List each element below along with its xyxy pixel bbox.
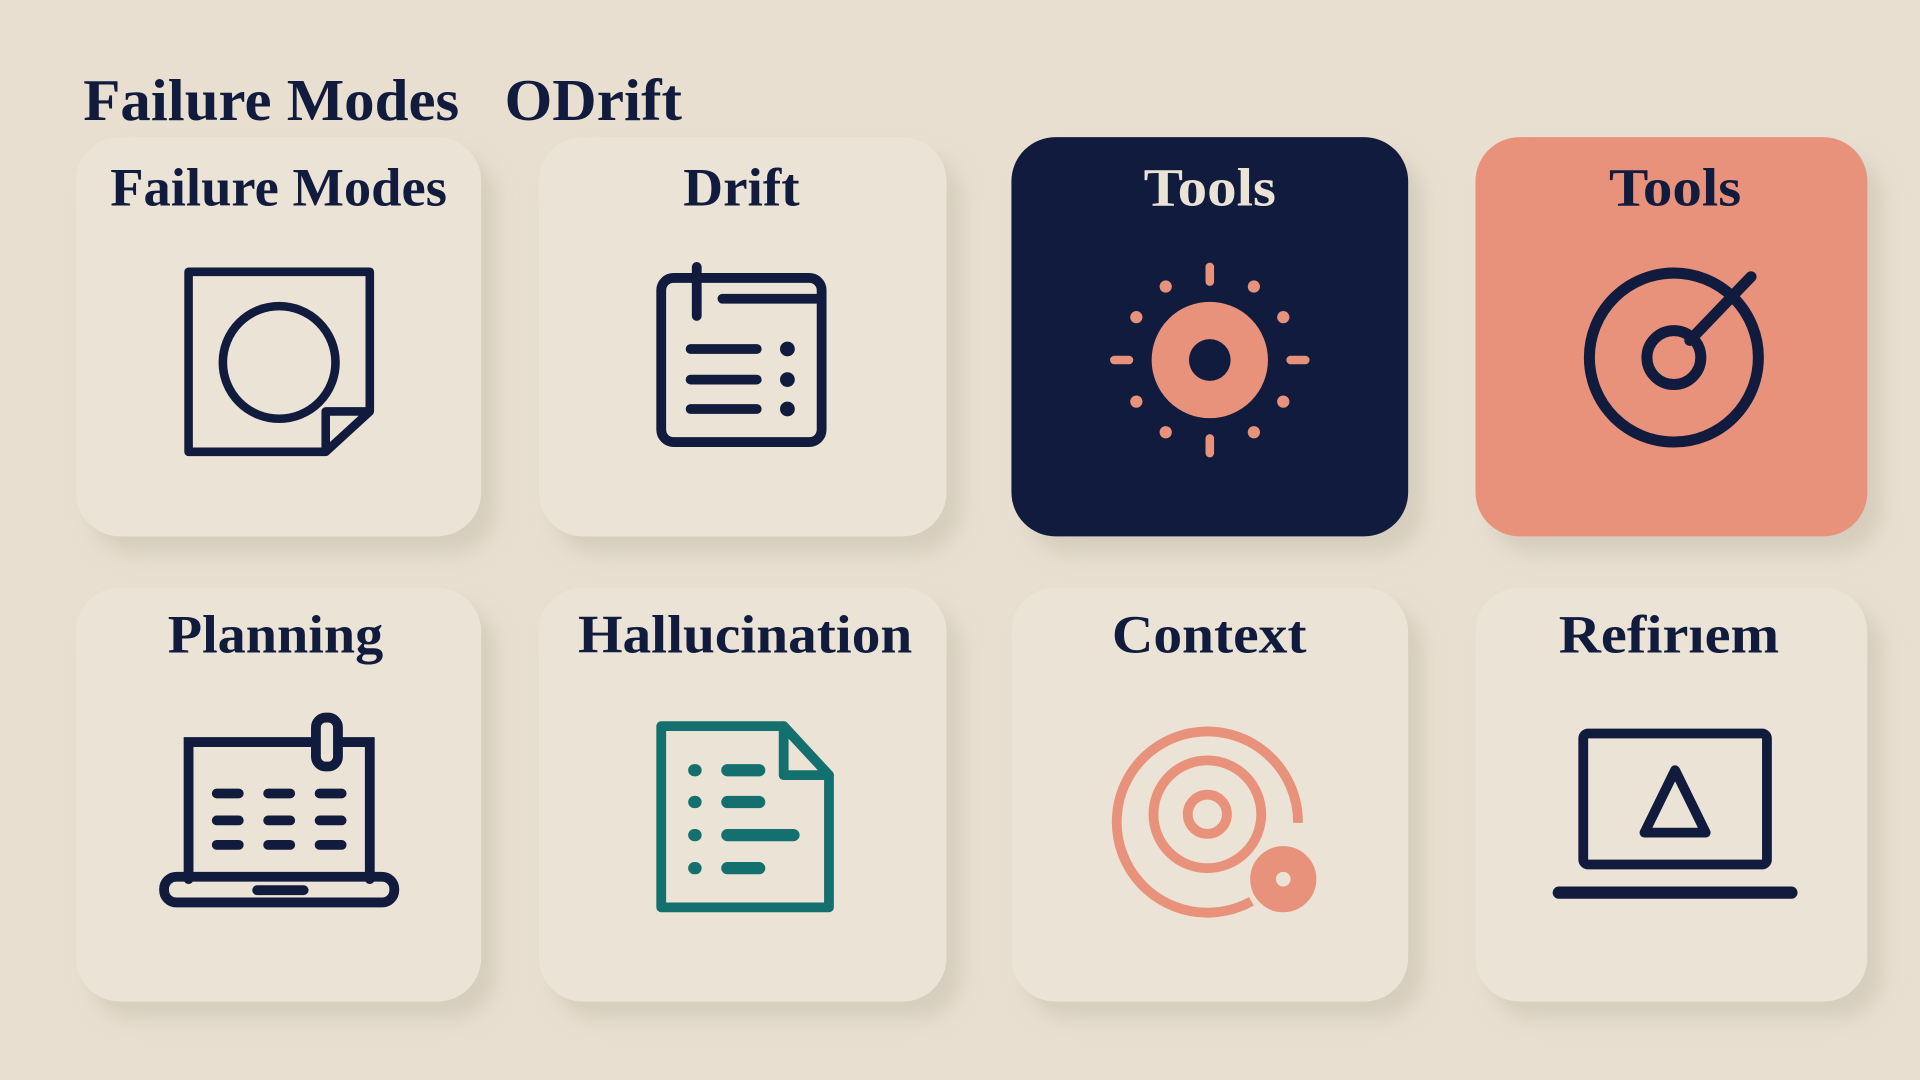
- icon: note with circle: [189, 272, 370, 452]
- heading: refinement: Refirıem: [1559, 605, 1779, 665]
- title: ODrift: [504, 68, 682, 133]
- panel: drift: [539, 137, 961, 553]
- panel: hallucination: [539, 588, 961, 1019]
- panel: context: [1011, 588, 1423, 1019]
- heading: failure modes: Failure Modes: [110, 158, 447, 218]
- icon: laptop triangle: [1559, 733, 1791, 893]
- icon: target: [1589, 273, 1758, 442]
- heading: planning: Planning: [168, 605, 383, 665]
- panel: failure modes: [76, 137, 496, 553]
- title: [83, 68, 682, 133]
- heading: context: Context: [1112, 605, 1307, 665]
- icon: laptop calendar: [164, 718, 394, 902]
- panel: planning: [76, 588, 496, 1019]
- heading: tools: Tools: [1609, 158, 1741, 218]
- heading: hallucination: Hallucination: [578, 605, 912, 665]
- panel: refinement: [1476, 588, 1882, 1019]
- icon: teal document: [661, 726, 829, 907]
- panel: tools dark: [1011, 137, 1423, 553]
- icon: list document: [661, 267, 822, 442]
- title: Failure Modes: [83, 68, 459, 133]
- heading: drift: Drift: [683, 158, 800, 218]
- icon: sun: [1114, 267, 1305, 453]
- panel: tools coral: [1476, 137, 1882, 553]
- icon: concentric circles: [1117, 731, 1311, 913]
- heading: tools: Tools: [1144, 158, 1276, 218]
